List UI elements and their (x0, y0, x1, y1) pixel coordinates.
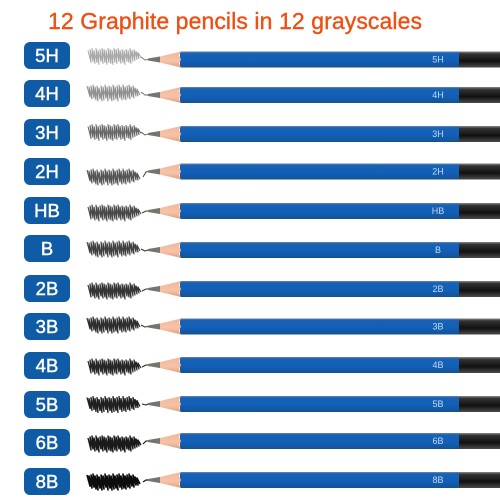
scribble: 5H (88, 48, 148, 64)
scribble: 6B (88, 436, 148, 452)
pencil row: 3B (24, 313, 500, 340)
pencil: B (148, 242, 500, 258)
badge: 2H (24, 158, 70, 185)
pencil: 5B (148, 396, 500, 412)
badge: 4H (24, 80, 70, 107)
title: 12 Graphite pencils in 12 grayscales (48, 8, 422, 34)
pencil: 4H: 4H (432, 90, 444, 100)
pencil: HB (148, 203, 500, 219)
pencil: 4B (148, 357, 500, 373)
pencil: 4B: 4B (432, 360, 444, 370)
pencil row: 2B (24, 275, 500, 302)
pencil: 2H (148, 164, 500, 180)
pencil row: 8B (24, 468, 500, 495)
pencil: 6B: 6B (432, 436, 444, 446)
pencil row: B (24, 235, 500, 262)
pencil row: 4H (24, 80, 500, 107)
badge: B (24, 235, 70, 262)
scribble: 3B (87, 317, 148, 333)
scribble: 3H (88, 124, 148, 140)
badge: 3H (24, 119, 70, 146)
pencil: 5B: 5B (432, 399, 444, 409)
scribble: 5B (87, 396, 148, 412)
scribble: 8B (87, 474, 148, 490)
pencil row: 2H (24, 158, 500, 185)
pencil row: HB (24, 197, 500, 224)
pencil row: 5B (24, 391, 500, 418)
badge: 5B: 5B (36, 394, 58, 415)
badge: HB (24, 197, 70, 224)
pencil row: 4B (24, 352, 500, 379)
scribble: B (87, 241, 148, 257)
badge: 2B (24, 275, 70, 302)
badge: 3B (24, 313, 70, 340)
badge: 5B (24, 391, 70, 418)
badge: 6B: 6B (36, 432, 58, 453)
pencil: 2B: 2B (432, 284, 444, 294)
pencil: 6B (148, 433, 500, 449)
pencil: HB: HB (432, 206, 444, 216)
badge: 8B (24, 468, 70, 495)
pencil row: 5H (24, 42, 500, 69)
badge: 4B (24, 352, 70, 379)
pencil: 4H (148, 87, 500, 103)
badge: 3B: 3B (36, 316, 58, 337)
scribble: 4B (88, 359, 148, 375)
badge: 3H: 3H (35, 122, 59, 143)
scribble: 4H (87, 85, 148, 101)
pencil: 5H (148, 52, 500, 68)
pencil: 8B: 8B (432, 475, 444, 485)
badge: 2B: 2B (36, 278, 58, 299)
badge: 8B: 8B (36, 471, 58, 492)
badge: 4B: 4B (36, 355, 58, 376)
pencil: 3B (148, 318, 500, 334)
pencil: 8B (148, 472, 500, 488)
pencil row: 6B (24, 429, 500, 456)
badge: HB: HB (34, 200, 60, 221)
badge: 2H: 2H (35, 161, 59, 182)
badge: 4H: 4H (35, 83, 59, 104)
badge: B: B (41, 238, 53, 259)
pencil: B: B (435, 245, 441, 255)
badge: 5H: 5H (35, 45, 59, 66)
pencil: 5H: 5H (432, 54, 444, 64)
pencil: 3H: 3H (432, 129, 444, 139)
pencil: 2H: 2H (432, 166, 444, 176)
scribble: 2H (87, 169, 148, 185)
pencil: 2B (148, 281, 500, 297)
scribble: 2B (88, 283, 148, 299)
pencil: 3B: 3B (432, 322, 444, 332)
pencil row: 3H (24, 119, 500, 146)
pencil: 3H (148, 126, 500, 142)
badge: 6B (24, 429, 70, 456)
scribble: HB (88, 205, 148, 221)
badge: 5H (24, 42, 70, 69)
